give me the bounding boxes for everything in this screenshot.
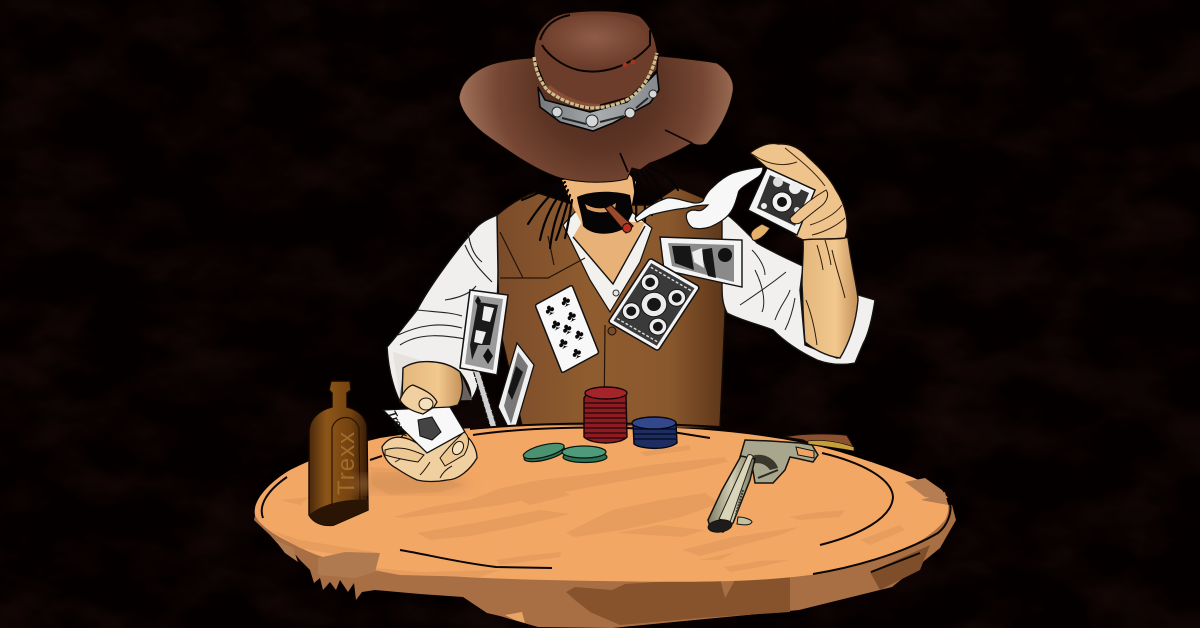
figure: right arm <box>802 236 858 358</box>
card: eight of clubs: ♣ <box>564 306 579 327</box>
upper fingers <box>400 385 437 414</box>
card: skewed falling card <box>498 343 534 437</box>
chips: green <box>522 440 607 465</box>
card: eight of clubs: ♣ <box>572 325 587 345</box>
table top <box>255 426 948 582</box>
card: eight of clubs: ♣ <box>556 333 571 354</box>
card: jack of diamonds <box>460 290 508 375</box>
card: patterned back <box>608 258 700 351</box>
held card <box>748 168 815 235</box>
shirt front and neck <box>563 212 652 312</box>
revolver <box>707 434 855 534</box>
table side edge <box>254 480 956 628</box>
right hand <box>748 143 847 240</box>
figure: vest and torso <box>495 187 727 430</box>
cigar <box>605 205 633 233</box>
card: eight of clubs <box>535 285 599 373</box>
figure: left shirt sleeve <box>387 215 498 402</box>
card: eight of clubs: ♣ <box>560 319 575 339</box>
hat rope <box>534 53 657 108</box>
revolver grip <box>783 434 855 449</box>
beard <box>577 192 633 234</box>
hat band <box>538 72 659 131</box>
card: queen horizontal <box>660 237 742 287</box>
card: eight of clubs: ♣ <box>542 300 557 320</box>
hat <box>459 11 733 182</box>
card: eight of clubs: ♣ <box>548 315 563 335</box>
dealt card: Trexx <box>385 409 410 441</box>
lower hand <box>382 432 477 482</box>
thumb <box>440 432 468 466</box>
card: eight of clubs: ♣ <box>558 291 573 312</box>
table edge lines <box>262 423 951 574</box>
hat brim <box>459 56 733 182</box>
figure: face <box>522 168 678 248</box>
bottle <box>309 381 368 525</box>
chips: red stack <box>584 387 627 443</box>
chips: blue stack <box>632 417 677 448</box>
card: edge-on falling card <box>473 370 497 443</box>
wood grain <box>270 445 905 577</box>
hat crown <box>534 11 658 108</box>
thumb <box>751 224 770 240</box>
card: eight of clubs: ♣ <box>569 343 584 363</box>
revolver frame <box>740 440 818 483</box>
smoke <box>635 167 763 229</box>
bottle embossed label: Trexx <box>333 431 360 495</box>
revolver barrel <box>708 456 755 532</box>
table <box>254 423 956 628</box>
left hand holding a card <box>350 385 477 494</box>
figure: right sleeve <box>722 212 875 364</box>
hair <box>522 168 678 248</box>
fingers over card <box>790 190 828 224</box>
figure: left forearm <box>402 362 462 410</box>
